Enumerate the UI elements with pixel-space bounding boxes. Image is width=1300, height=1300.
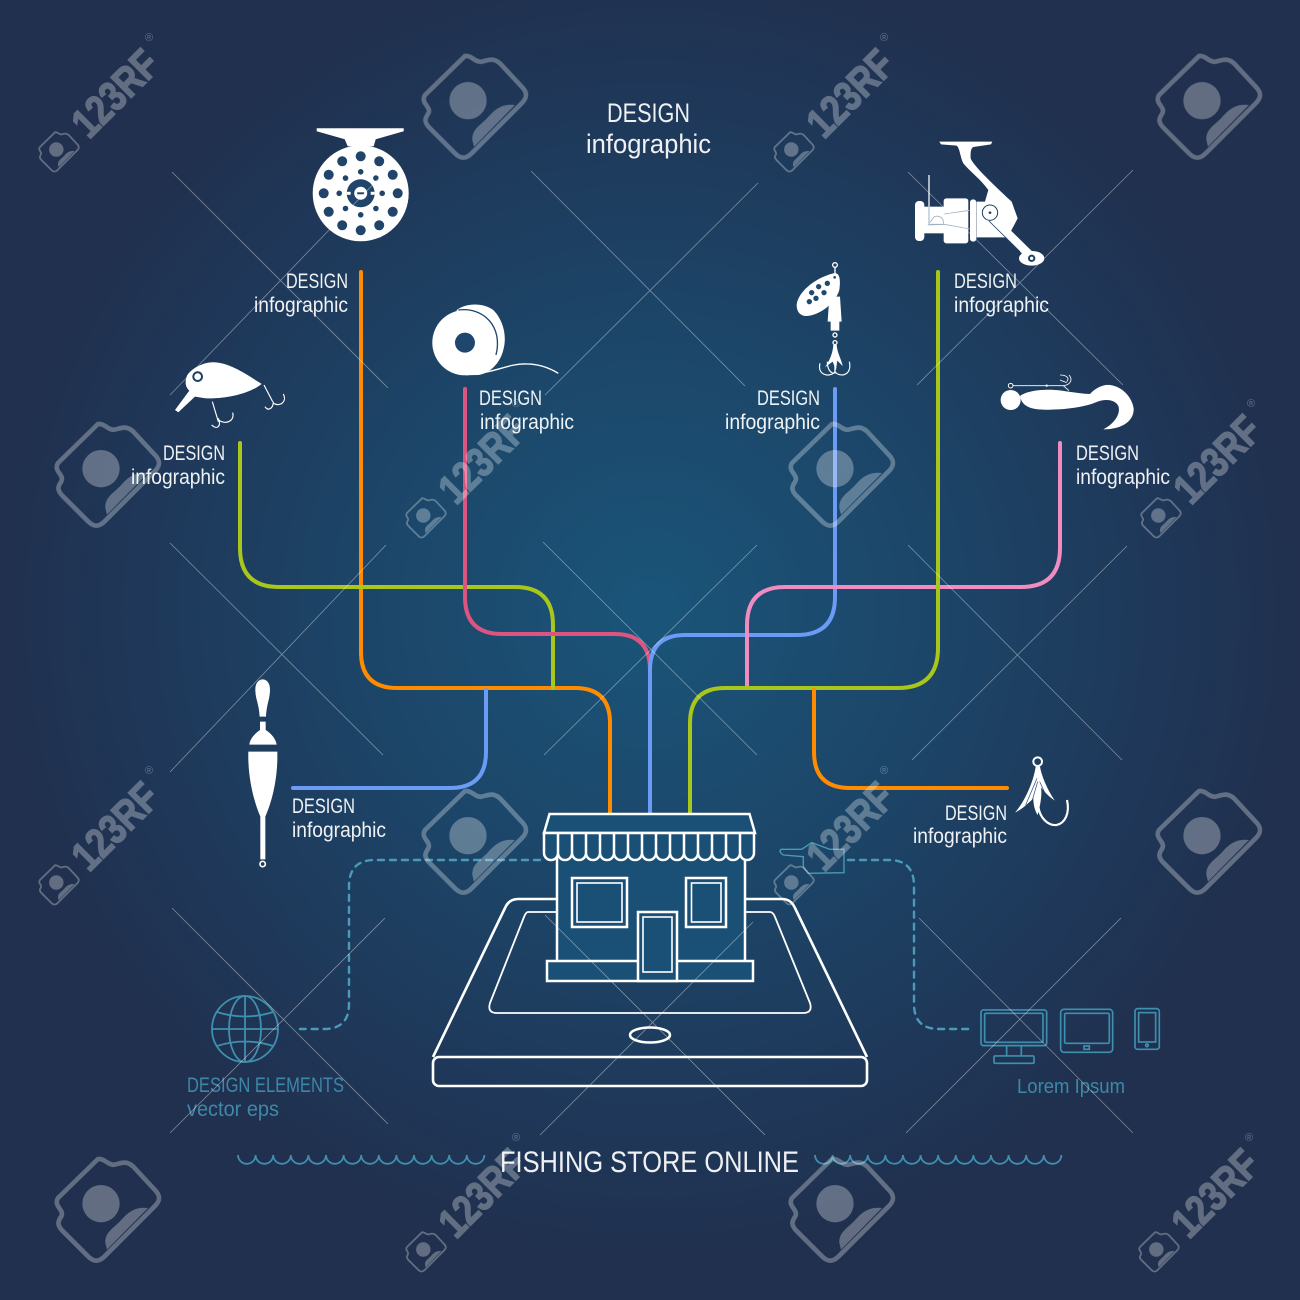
icon: crankbait lure [175,362,284,427]
line: green left [240,443,553,688]
label: spinner lure: DESIGN [757,387,820,410]
watermark: 123RF 8 [1139,1132,1268,1272]
label: feathered hook: infographic [913,825,1007,848]
label: fly reel [254,270,348,317]
watermark: 123RF 8: ® [1245,1132,1253,1144]
label: spinning reel: infographic [954,294,1049,317]
icon: fly reel [313,128,409,241]
icon: monitor [981,1010,1047,1063]
watermark: 123RF 3: 123RF [429,406,535,512]
label: crankbait lure: infographic [131,466,225,489]
line: light pink [747,443,1060,688]
watermark: 123RF 2 [774,32,903,172]
watermark: 123RF 5 [39,765,168,905]
label: soft grub lure: DESIGN [1076,442,1139,465]
label: design elements [187,1074,344,1121]
connector lines [240,272,1060,815]
watermark: 123RF 7: 123RF [429,1140,535,1246]
label: spinner lure [725,387,820,434]
line: orange main [361,272,610,815]
icon: line spool [432,304,558,375]
dashed connectors [300,860,974,1029]
watermark: 123RF 7: ® [512,1132,520,1144]
icon: pointing hand [780,843,844,873]
icons: devices [981,1009,1159,1063]
label: crankbait lure [131,442,225,489]
watermark: large logo 7 [57,1159,159,1261]
watermark: 123RF 8: 123RF [1162,1140,1268,1246]
title [586,98,711,159]
watermark: large logo 3 [57,424,159,526]
label: soft grub lure: infographic [1076,466,1170,489]
tablet [433,899,867,1086]
line: blue centre [650,389,835,815]
label: spinning reel [954,270,1049,317]
watermark: 123RF 1: ® [145,32,153,44]
watermark: 123RF 3: ® [512,398,520,410]
label: feathered hook [913,802,1007,848]
line: orange right [814,690,1007,788]
label: crankbait lure: DESIGN [163,442,225,465]
watermark: 123RF 5: 123RF [62,773,168,879]
watermark: 123RF 6: 123RF [797,773,903,879]
watermark: large logo 6 [1158,791,1260,893]
line: blue left [293,690,486,788]
label: spinning reel: DESIGN [954,270,1017,293]
label: line spool: DESIGN [479,387,542,410]
label: fly reel: DESIGN [286,270,348,293]
store window left [572,878,627,927]
watermark: 123RF 2: 123RF [797,40,903,146]
label: fishing float: infographic [292,819,386,842]
watermark: large logo 1 [424,56,526,158]
line: green right [690,272,938,815]
icon: feathered hook [1015,757,1068,825]
watermark: large logo 8 [791,1159,893,1261]
icon: fishing float [248,679,277,867]
label: feathered hook: DESIGN [945,802,1007,825]
watermark: 123RF 6: ® [880,765,888,777]
watermark: 123RF 1: 123RF [62,40,168,146]
watermark: large logo 4 [791,424,893,526]
title: DESIGN [607,98,690,128]
icon: tablet [1061,1009,1113,1052]
label: fly reel: infographic [254,294,348,317]
label: design elements: vector eps [187,1098,279,1121]
store window right [686,878,726,927]
line: crimson [465,389,650,670]
watermark: large logo 5 [424,791,526,893]
wave: right [815,1155,1061,1164]
label: fishing float [292,795,386,842]
icon: spinner lure [797,263,850,375]
store [544,814,755,981]
watermark: 123RF 3 [406,398,535,538]
watermark: 123RF 4: 123RF [1164,406,1270,512]
icon: globe [212,996,278,1062]
watermark: 123RF 4 [1141,398,1270,538]
icon: soft grub lure [1001,375,1134,429]
label: design elements: DESIGN ELEMENTS [187,1074,344,1097]
label: fishing float: DESIGN [292,795,355,818]
watermark: 123RF 4: ® [1247,398,1255,410]
label: line spool [479,387,574,434]
title: infographic [586,129,711,159]
watermark: 123RF 5: ® [145,765,153,777]
label: lorem ipsum: Lorem Ipsum [1017,1076,1125,1098]
watermark: large logo 2 [1158,56,1260,158]
label: soft grub lure [1076,442,1170,489]
wave: left [238,1155,484,1164]
icon: spinning reel [915,142,1044,266]
label: spinner lure: infographic [725,411,820,434]
watermark: 123RF 1 [39,32,168,172]
footer title: FISHING STORE ONLINE [500,1146,799,1179]
watermark: 123RF 2: ® [880,32,888,44]
icon: phone [1135,1009,1159,1049]
label: line spool: infographic [480,411,574,434]
store door [638,912,677,981]
watermark: 123RF 7 [406,1132,535,1272]
watermark: 123RF 6 [774,765,903,905]
